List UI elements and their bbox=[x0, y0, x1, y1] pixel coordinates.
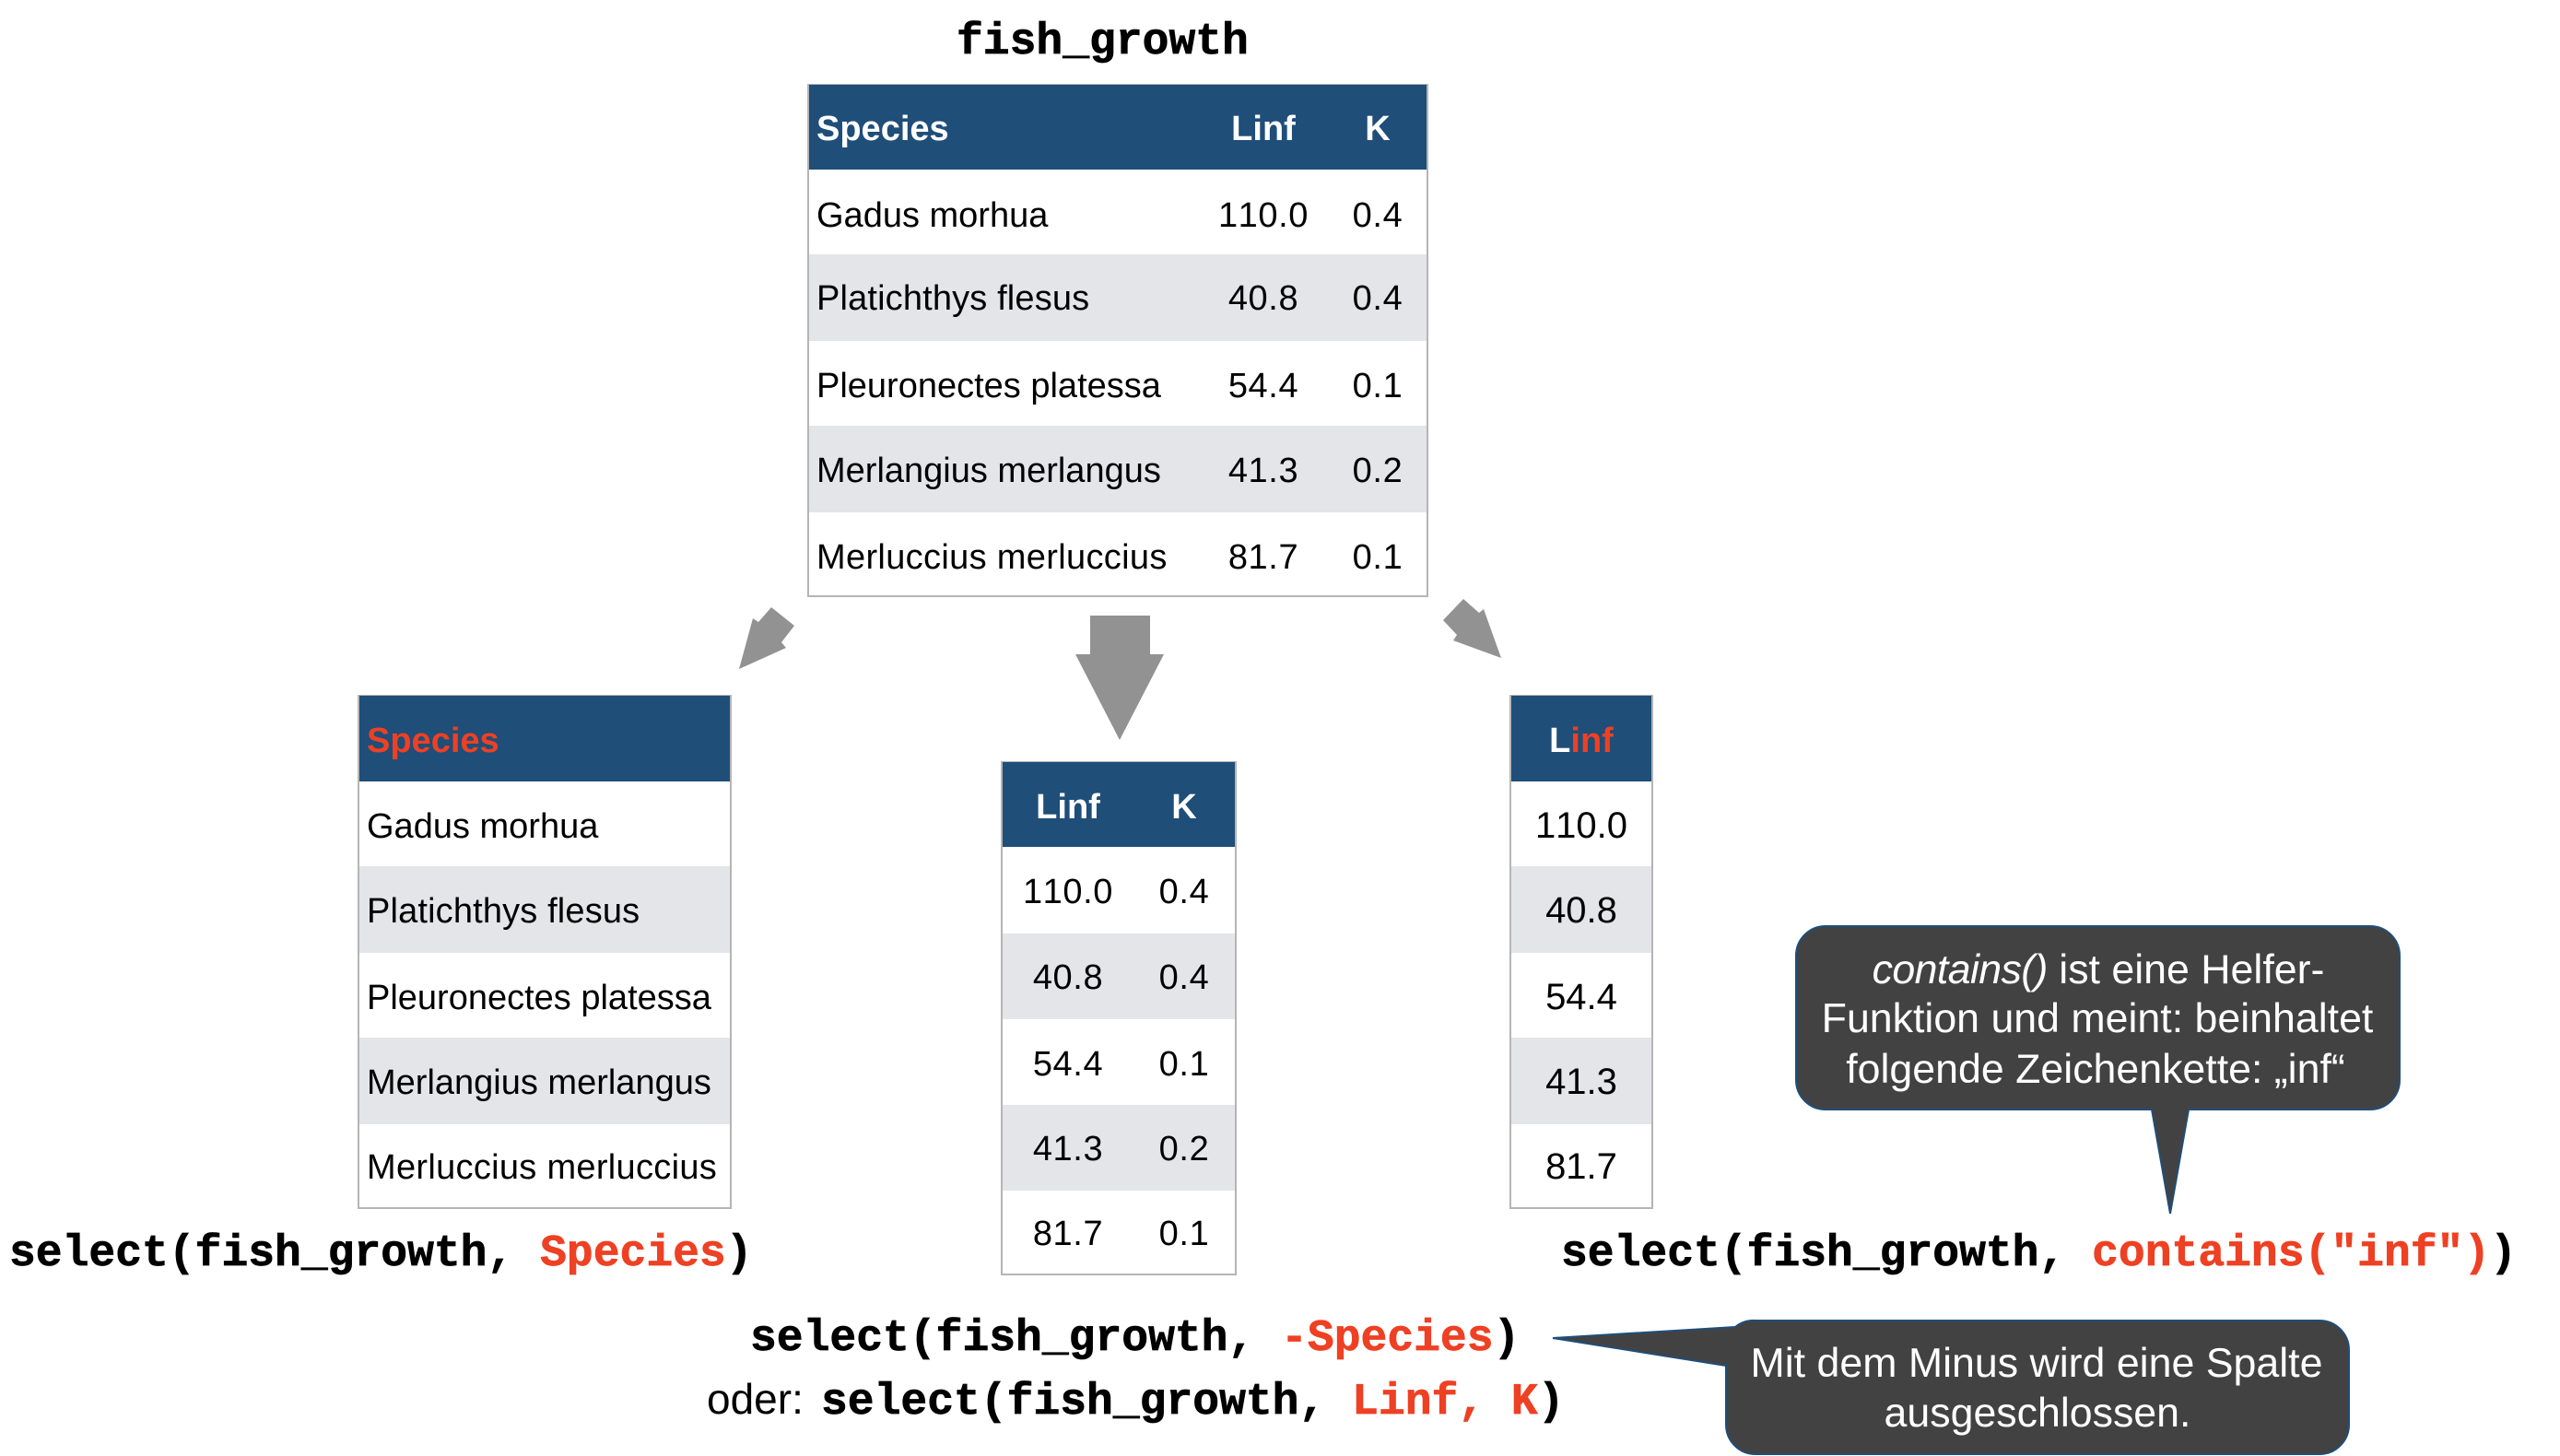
table: fish_growth full: Pleuronectes platessa bbox=[816, 367, 1162, 405]
callout: minus excludes column: Mit dem Minus wird eine Spalte bbox=[1751, 1341, 2322, 1386]
table: fish_growth full: Gadus morhua bbox=[816, 196, 1049, 235]
callout: contains helper: folgende Zeichenkette: „inf“ bbox=[1846, 1047, 2345, 1092]
table: Linf via contains: 41.3 bbox=[1545, 1062, 1617, 1102]
table: Linf via contains: 40.8 bbox=[1545, 890, 1617, 931]
table: Linf and K: K bbox=[1171, 788, 1197, 827]
code: oder select Linf K: Linf, K) bbox=[1352, 1378, 1565, 1427]
title: fish_growth: fish_growth bbox=[957, 18, 1249, 67]
table: Linf via contains: 110.0 bbox=[1535, 805, 1627, 846]
table: fish_growth full: 81.7 bbox=[1228, 538, 1298, 577]
callout: minus excludes column: ausgeschlossen. bbox=[1885, 1391, 2190, 1436]
table: Linf via contains: 54.4 bbox=[1545, 977, 1617, 1017]
table: Species only: Species bbox=[367, 722, 499, 760]
table: fish_growth full: 0.1 bbox=[1353, 538, 1403, 577]
table: Species only: Merluccius merluccius bbox=[367, 1148, 717, 1187]
table: Species only: Platichthys flesus bbox=[367, 892, 640, 931]
callout: contains helper: Funktion und meint: beinhaltet bbox=[1822, 996, 2374, 1041]
table: fish_growth full bbox=[808, 85, 1427, 596]
table: fish_growth full: 0.4 bbox=[1353, 196, 1403, 235]
table: fish_growth full: 0.2 bbox=[1353, 452, 1403, 490]
code: select contains: select(fish_growth, contains("inf")) bbox=[1561, 1229, 2517, 1279]
table: Linf and K: 81.7 bbox=[1033, 1215, 1103, 1253]
table: fish_growth full: 0.1 bbox=[1353, 367, 1403, 405]
table: fish_growth full: 54.4 bbox=[1228, 367, 1298, 405]
table: Linf and K: 54.4 bbox=[1033, 1045, 1103, 1084]
table: fish_growth full: K bbox=[1365, 110, 1391, 148]
table: Species only bbox=[358, 696, 731, 1208]
code: select minus Species: select(fish_growth, -Species) bbox=[750, 1314, 1520, 1364]
table: Species only: Merlangius merlangus bbox=[367, 1063, 711, 1102]
arrow: to left table bbox=[739, 607, 794, 669]
callout: minus excludes column bbox=[1553, 1321, 2349, 1454]
table: Linf via contains: 81.7 bbox=[1545, 1146, 1617, 1187]
table: fish_growth full: 110.0 bbox=[1218, 196, 1309, 235]
code: select Species: select(fish_growth, Species) bbox=[9, 1229, 753, 1279]
table: Linf and K: 40.8 bbox=[1033, 958, 1103, 997]
table: Linf and K: 0.1 bbox=[1159, 1215, 1209, 1253]
table: Species only: Gadus morhua bbox=[367, 807, 599, 846]
table: fish_growth full: Merluccius merluccius bbox=[816, 538, 1168, 577]
table: Linf and K: 41.3 bbox=[1033, 1130, 1103, 1168]
table: fish_growth full: 41.3 bbox=[1228, 452, 1298, 490]
table: Linf and K: Linf bbox=[1036, 788, 1100, 827]
table: Linf and K: 0.4 bbox=[1159, 873, 1209, 911]
table: Linf via contains: Linf bbox=[1549, 722, 1614, 760]
table: Linf and K: 0.4 bbox=[1159, 958, 1209, 997]
callout: contains helper: contains() ist eine Helfer- bbox=[1873, 947, 2324, 992]
arrow: to right table bbox=[1443, 599, 1501, 658]
table: fish_growth full: 0.4 bbox=[1353, 279, 1403, 318]
code: oder select Linf K: oder: bbox=[707, 1375, 816, 1423]
table: fish_growth full: Merlangius merlangus bbox=[816, 452, 1161, 490]
table: Linf and K bbox=[1002, 762, 1236, 1274]
table: Linf and K: 110.0 bbox=[1023, 873, 1113, 911]
table: fish_growth full: 40.8 bbox=[1228, 279, 1298, 318]
table: fish_growth full: Species bbox=[816, 110, 949, 148]
table: Linf and K: 0.2 bbox=[1159, 1130, 1209, 1168]
table: Linf via contains bbox=[1510, 696, 1652, 1208]
table: fish_growth full: Platichthys flesus bbox=[816, 279, 1089, 318]
callout: contains helper bbox=[1796, 926, 2400, 1214]
table: fish_growth full: Linf bbox=[1231, 110, 1296, 148]
table: Species only: Pleuronectes platessa bbox=[367, 979, 712, 1017]
arrow: to center table bbox=[1075, 616, 1164, 740]
table: Linf and K: 0.1 bbox=[1159, 1045, 1209, 1084]
code: oder select Linf K: select(fish_growth, bbox=[821, 1378, 1352, 1427]
